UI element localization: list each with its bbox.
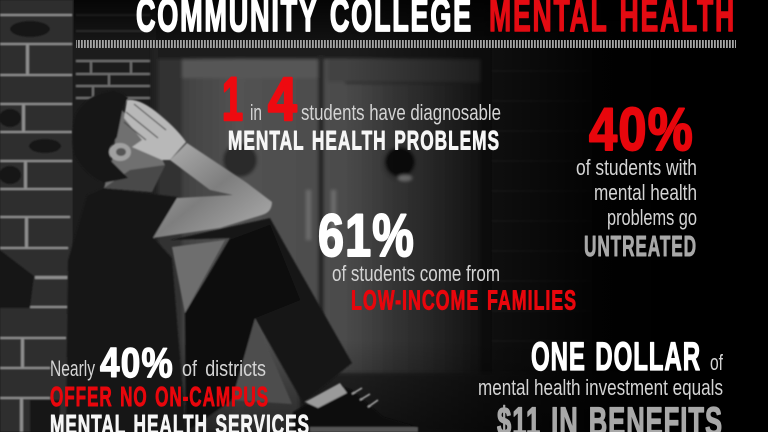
arm [153, 143, 272, 238]
stat: nearly 40% of districts: OFFER NO ON-CAMPUS [50, 381, 269, 412]
stat: 61% low-income: LOW-INCOME FAMILIES [351, 284, 577, 316]
stat: 1 in 4 students: MENTAL HEALTH PROBLEMS [228, 126, 500, 156]
shirt and torso [66, 188, 186, 432]
hand [124, 100, 186, 160]
stat: 1 in 4 students: in [250, 100, 262, 125]
hair [72, 91, 128, 183]
brick pillar [0, 0, 73, 432]
stat: 1 in 4 students: 4 [268, 65, 298, 133]
stat: 40% untreated [576, 96, 697, 263]
stat: 1 in 4 students: 1 [222, 65, 244, 133]
stat: nearly 40% of districts: of districts [182, 356, 266, 381]
neck and face [104, 108, 165, 192]
stat: 61% low-income: of students come from [332, 261, 500, 286]
door [152, 45, 492, 432]
right-hand brick wall [492, 45, 592, 432]
stat: 40% untreated: problems go [607, 205, 697, 230]
stat: one dollar investment [478, 335, 724, 432]
back brick wall [74, 0, 156, 260]
stat: nearly 40% of districts: Nearly [50, 356, 95, 381]
ear [109, 143, 131, 161]
person [66, 91, 418, 432]
stat: 1 in 4 students: students have diagnosable [301, 100, 501, 125]
legs [170, 218, 352, 432]
gap between torso and thigh [172, 240, 225, 313]
stat: 61% low-income: 61% [318, 202, 415, 269]
stat: nearly 40% of districts [50, 339, 310, 432]
divider strip [76, 40, 736, 48]
stat: nearly 40% of districts: 40% [100, 339, 174, 386]
stat: 40% untreated: of students with [576, 155, 697, 180]
stat: 61% low-income [318, 202, 577, 316]
stat: 1 in 4 students [222, 65, 501, 156]
stat: one dollar investment: of [710, 350, 724, 375]
floor [300, 373, 630, 432]
stat: 40% untreated: mental health [594, 180, 697, 205]
gap below the knee [232, 318, 292, 404]
shoe [293, 386, 417, 432]
stat: 40% untreated: 40% [589, 96, 694, 163]
